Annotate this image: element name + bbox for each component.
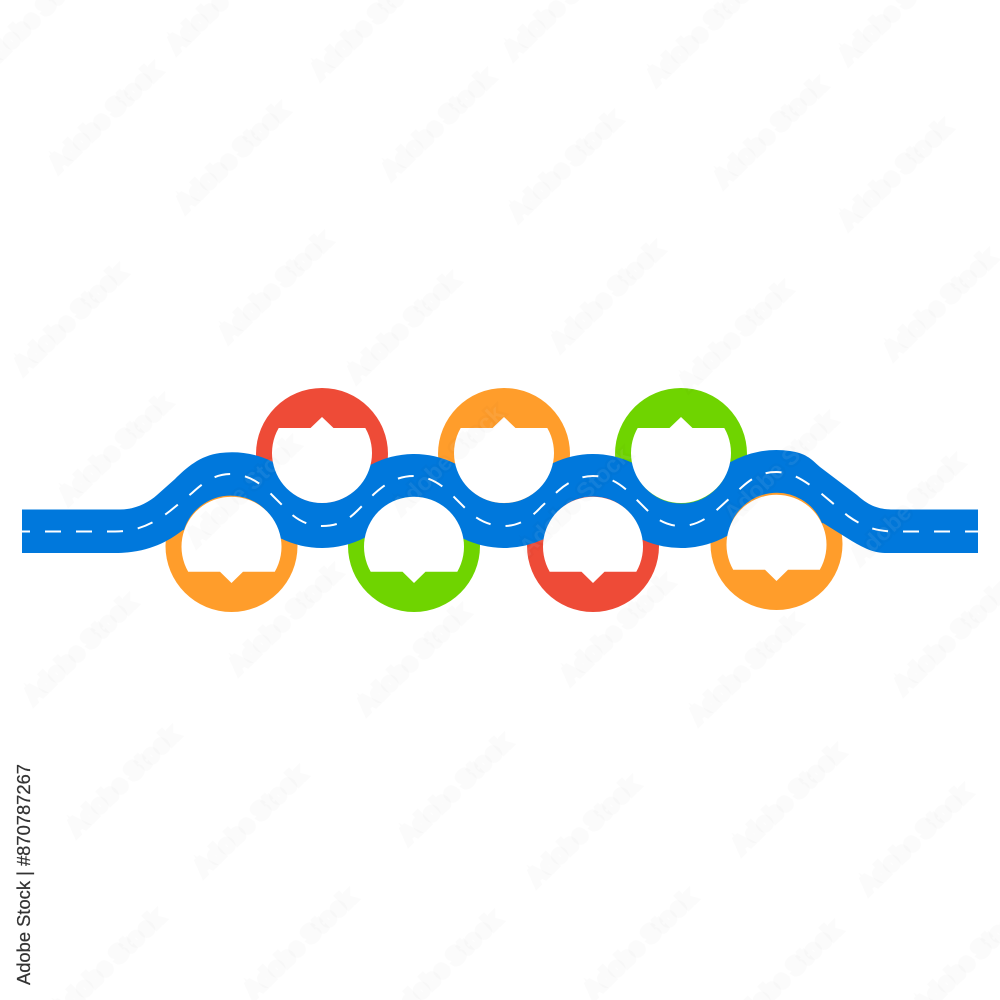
watermark pattern: Adobe Stock	[171, 97, 293, 216]
watermark pattern: Adobe Stock	[352, 599, 474, 718]
watermark pattern: Adobe Stock	[709, 72, 831, 191]
watermark pattern: Adobe Stock	[54, 389, 176, 508]
watermark pattern: Adobe Stock	[189, 761, 311, 880]
vertical stock id text: Adobe Stock | #870787267	[14, 764, 34, 985]
circle marker: bottom green	[348, 480, 480, 612]
watermark pattern: Adobe Stock	[504, 106, 626, 225]
watermark pattern: Adobe Stock	[546, 236, 668, 355]
white label cutout: bottom orange 2	[726, 495, 826, 581]
circle marker: bottom orange 2	[710, 478, 842, 610]
circle marker: top green	[615, 388, 747, 520]
watermark pattern: Adobe Stock	[214, 227, 336, 346]
watermark pattern: Adobe Stock	[674, 276, 796, 395]
circle marker: bottom orange 1	[166, 480, 298, 612]
watermark pattern: Adobe Stock	[182, 431, 304, 550]
watermark pattern: Adobe Stock	[224, 559, 346, 678]
watermark pattern: Adobe Stock	[514, 441, 636, 560]
white label cutout: top green	[631, 417, 731, 503]
circle marker: top orange	[438, 388, 570, 520]
white label cutout: bottom green	[364, 497, 464, 583]
watermark pattern: Adobe Stock	[719, 407, 841, 526]
watermark pattern: Adobe Stock	[19, 589, 141, 708]
watermark pattern: Adobe Stock	[62, 721, 184, 840]
white label cutout: bottom orange 1	[182, 497, 282, 583]
watermark pattern: Adobe Stock	[727, 739, 849, 858]
white label cutout: top red	[272, 417, 372, 503]
watermark pattern: Adobe Stock	[522, 771, 644, 890]
watermark pattern: Adobe Stock	[394, 729, 516, 848]
watermark pattern: Adobe Stock	[377, 64, 499, 183]
watermark pattern: Adobe Stock	[579, 884, 701, 1000]
watermark pattern: Adobe Stock	[239, 884, 361, 1000]
watermark pattern: Adobe Stock	[846, 449, 968, 568]
watermark pattern: Adobe Stock	[44, 57, 166, 176]
watermark pattern: Adobe Stock	[342, 267, 464, 386]
circle marker: top red	[256, 388, 388, 520]
watermark pattern: Adobe Stock	[9, 259, 131, 378]
watermark pattern: Adobe Stock	[684, 609, 806, 728]
watermark pattern: Adobe Stock	[834, 114, 956, 233]
watermark pattern: Adobe Stock	[854, 779, 976, 898]
winding blue road body	[22, 450, 978, 553]
dashed road centre line	[22, 472, 978, 532]
white label cutout: top orange	[454, 417, 554, 503]
watermark pattern: Adobe Stock	[556, 569, 678, 688]
watermark pattern: Adobe Stock	[387, 399, 509, 518]
white label cutout: bottom red	[543, 497, 643, 583]
watermark pattern: Adobe Stock	[879, 244, 1000, 363]
circle marker: bottom red	[527, 480, 659, 612]
